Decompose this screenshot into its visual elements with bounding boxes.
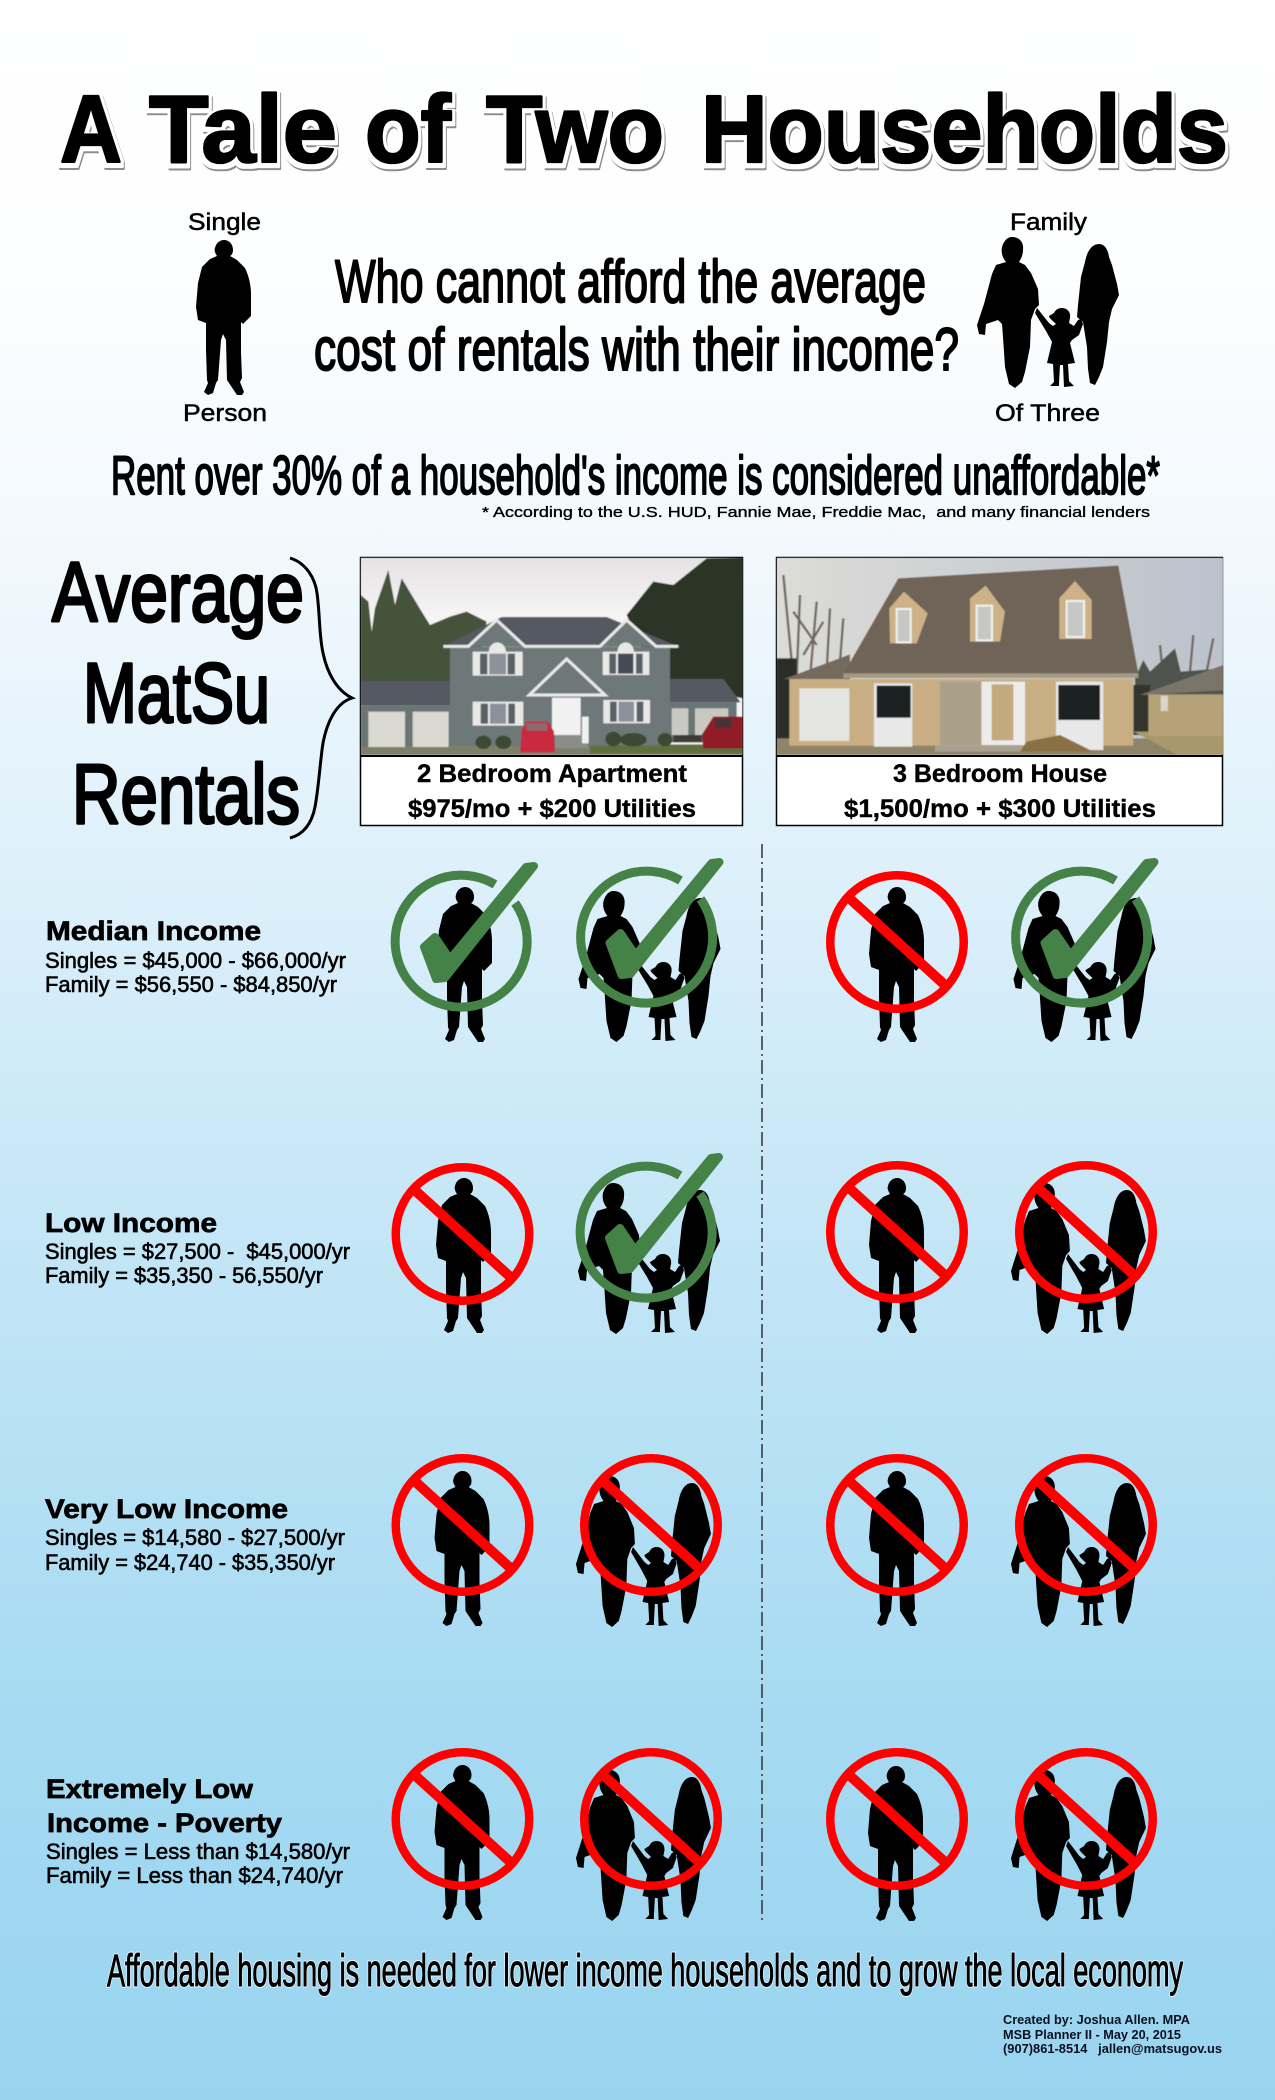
row 4 label: extremely low income: Income - Poverty	[47, 1808, 282, 1838]
photo: apartment building	[361, 558, 743, 755]
title: Two	[486, 76, 664, 183]
legend: single person: Single	[188, 209, 261, 236]
icon: low, single, apartment unaffordable	[396, 1167, 529, 1333]
icon: extremely low, single, apartment unaffordable	[396, 1752, 529, 1920]
icon: extremely low, family, apartment unaffordable	[576, 1752, 718, 1921]
heading: Average MatSu Rentals	[52, 545, 304, 841]
row 3 label: very low income: Family = $24,740 - $35,350/yr	[45, 1550, 335, 1575]
legend: family of three: Of Three	[995, 400, 1100, 427]
icon: very low, family, apartment unaffordable	[576, 1458, 718, 1627]
legend: family of three	[977, 209, 1119, 427]
title: A	[60, 76, 122, 183]
row 3 label: very low income: Very Low Income	[45, 1494, 288, 1524]
house caption: 3 Bedroom House	[893, 760, 1107, 788]
row 4 label: extremely low income: Family = Less than $24,740/yr	[46, 1863, 343, 1888]
icon: low, family, house unaffordable	[1011, 1165, 1153, 1334]
icon: median, single, house unaffordable	[830, 875, 964, 1042]
row 3 label: very low income	[45, 1494, 345, 1575]
row 1 label: median income: Median Income	[46, 916, 261, 946]
legend: family of three: Family	[1010, 209, 1087, 236]
house caption	[777, 755, 1222, 823]
icon: very low, family, house unaffordable	[1011, 1458, 1153, 1627]
row 2 label: low income	[45, 1208, 350, 1288]
legend: single person: Person	[183, 400, 267, 427]
apartment caption: $975/mo + $200 Utilities	[408, 795, 696, 823]
heading: Average MatSu Rentals: Rentals	[72, 747, 300, 841]
icon: very low, single, apartment unaffordable	[396, 1458, 529, 1626]
credits	[1003, 2012, 1222, 2056]
title: Tale	[149, 76, 337, 183]
title: Households	[701, 76, 1228, 183]
icon: extremely low, family, house unaffordable	[1011, 1752, 1153, 1921]
house caption: $1,500/mo + $300 Utilities	[844, 795, 1156, 823]
question heading: cost of rentals with their income?	[314, 316, 959, 383]
row 2 label: low income: Singles = $27,500 - $45,000/yr	[45, 1239, 350, 1264]
row 4 label: extremely low income	[46, 1774, 350, 1888]
row 1 label: median income: Singles = $45,000 - $66,000/yr	[45, 948, 346, 973]
icon: median, single, apartment affordable	[395, 866, 534, 1042]
row 4 label: extremely low income: Singles = Less than $14,580/yr	[46, 1839, 350, 1864]
apartment caption: 2 Bedroom Apartment	[417, 760, 688, 788]
brace pointing to rentals	[290, 558, 352, 838]
row 1 label: median income	[45, 916, 346, 997]
heading: Average MatSu Rentals: MatSu	[83, 646, 270, 740]
photo: house	[777, 558, 1223, 755]
panel: 2 bedroom apartment	[360, 558, 743, 826]
icon: extremely low, single, house unaffordable	[830, 1752, 964, 1921]
title	[60, 76, 1228, 183]
row 2 label: low income: Low Income	[45, 1208, 217, 1238]
question heading: Who cannot afford the average	[335, 248, 926, 315]
question heading	[314, 248, 959, 383]
apartment caption	[361, 755, 742, 823]
row 4 label: extremely low income: Extremely Low	[46, 1774, 254, 1804]
credits: MSB Planner II - May 20, 2015	[1003, 2027, 1181, 2042]
row 3 label: very low income: Singles = $14,580 - $27,500/yr	[45, 1525, 345, 1550]
icon: very low, single, house unaffordable	[830, 1458, 964, 1626]
footnote: * According to the U.S. HUD, Fannie Mae, Freddie Mac, and many financial lenders	[482, 504, 1150, 521]
icon: median, family, house affordable	[1014, 862, 1156, 1042]
credits: (907)861-8514 jallen@matsugov.us	[1003, 2041, 1222, 2056]
row 1 label: median income: Family = $56,550 - $84,850/yr	[45, 972, 337, 997]
icon: low, family, apartment affordable	[578, 1157, 720, 1334]
panel: 3 bedroom house	[776, 558, 1223, 826]
legend: single person	[183, 209, 267, 427]
title: of	[365, 76, 452, 183]
heading: Average MatSu Rentals: Average	[52, 545, 304, 639]
icon: median, family, apartment affordable	[578, 862, 720, 1042]
row 2 label: low income: Family = $35,350 - 56,550/yr	[45, 1263, 323, 1288]
icon: low, single, house unaffordable	[830, 1165, 964, 1333]
credits: Created by: Joshua Allen. MPA	[1003, 2012, 1191, 2027]
column divider	[761, 844, 763, 1921]
